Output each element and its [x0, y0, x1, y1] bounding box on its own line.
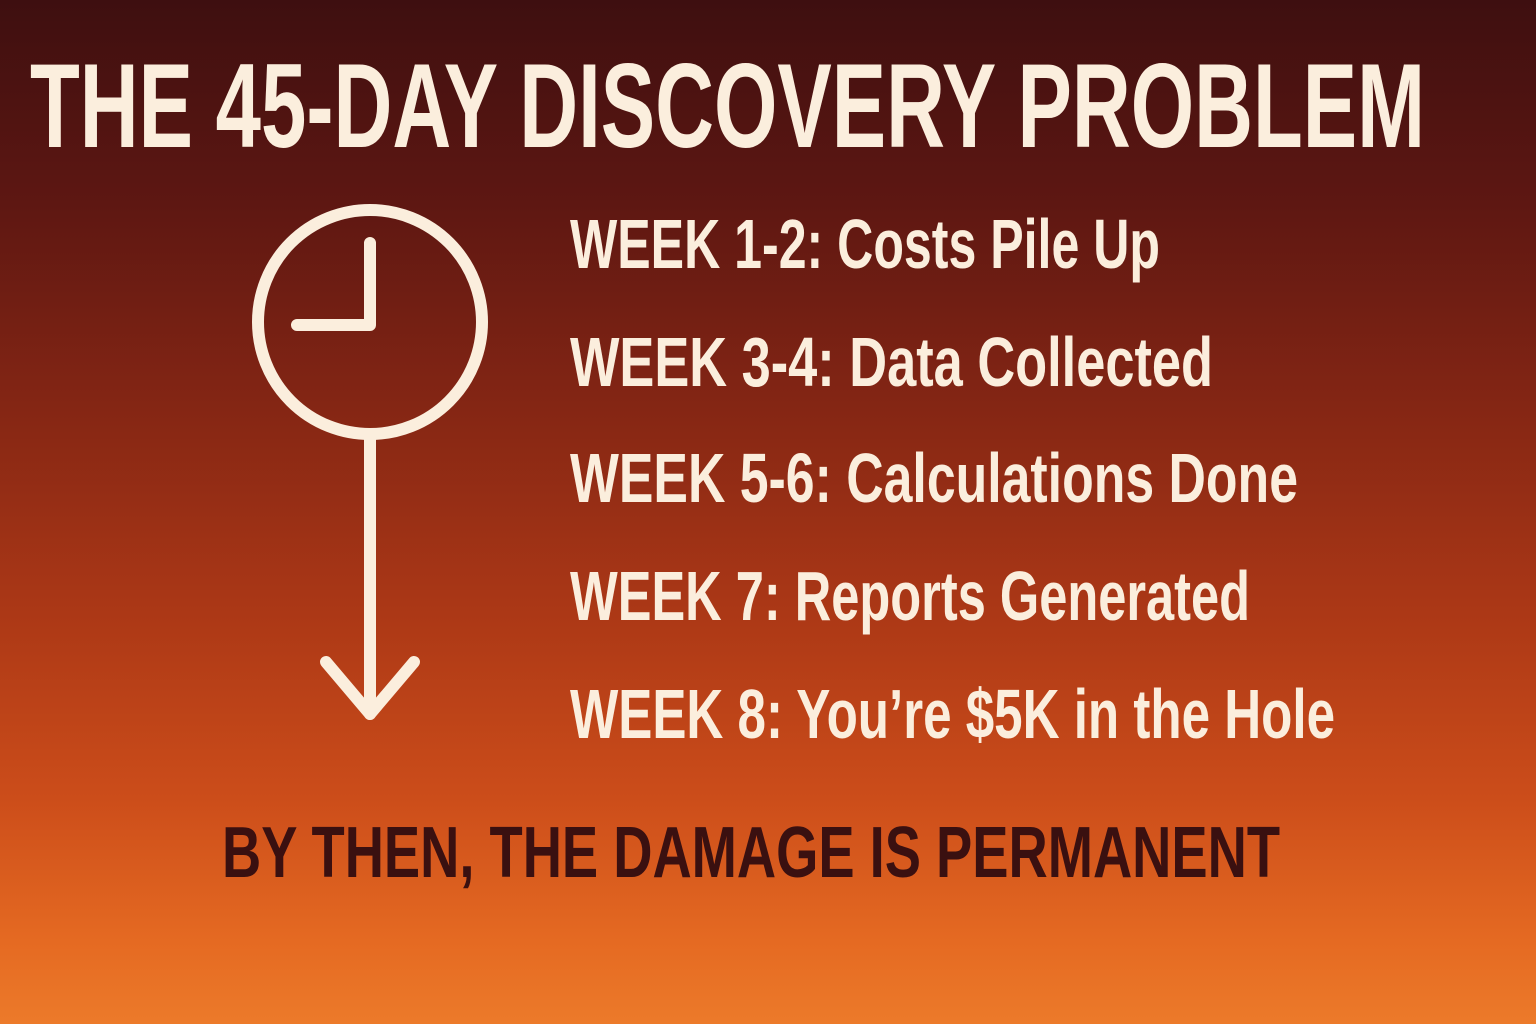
week 5-6: WEEK 5-6: Calculations Done: [570, 439, 1298, 517]
week 3-4: WEEK 3-4: Data Collected: [570, 323, 1213, 401]
icon: clock with downward arrow: [258, 210, 482, 714]
timeline text list: [570, 205, 1335, 753]
week 1-2: WEEK 1-2: Costs Pile Up: [570, 205, 1160, 283]
week 7: WEEK 7: Reports Generated: [570, 557, 1250, 635]
